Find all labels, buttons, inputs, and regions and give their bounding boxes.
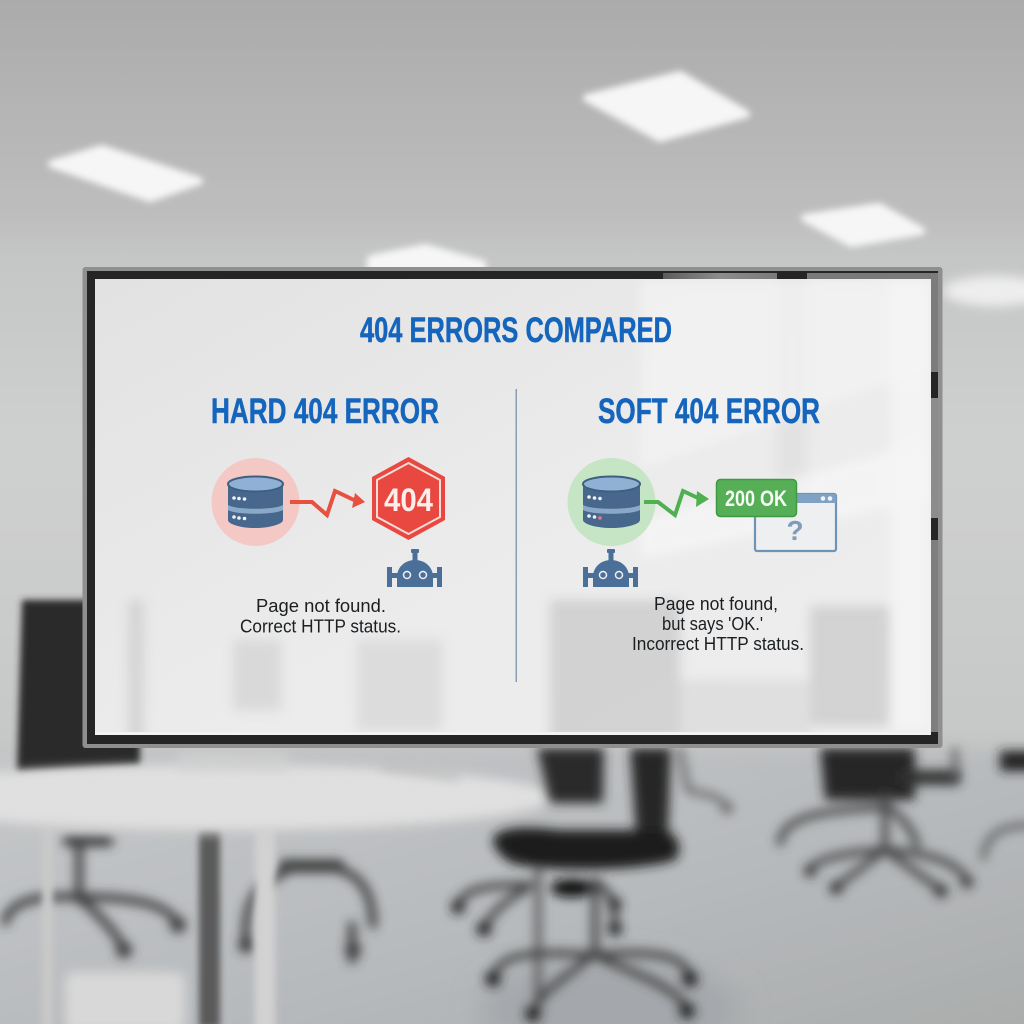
icon: 404 hexagon bbox=[372, 457, 445, 540]
title: 404 ERRORS COMPARED bbox=[360, 311, 672, 350]
divider bbox=[516, 389, 517, 682]
background chair base bbox=[680, 750, 730, 811]
heading: soft 404: SOFT 404 ERROR bbox=[598, 392, 820, 431]
ceiling lights bbox=[52, 75, 921, 285]
screen surface bbox=[95, 279, 931, 735]
icon: server in red circle bbox=[212, 458, 300, 546]
panel: soft 404 error bbox=[568, 392, 836, 654]
left stools and bases bbox=[5, 841, 373, 960]
icon: robot bbox=[583, 549, 638, 587]
icon: browser window with question mark: ? bbox=[786, 515, 804, 546]
items on table bbox=[178, 752, 460, 781]
screen reflections bbox=[95, 275, 931, 740]
centre office chair bbox=[451, 748, 698, 1022]
icon: browser window with question mark bbox=[755, 494, 836, 551]
icon: server in green circle bbox=[568, 458, 656, 546]
far right ceiling light bbox=[943, 276, 1024, 306]
text: hard 404 description bbox=[240, 595, 401, 636]
round table bbox=[0, 765, 552, 834]
icon: 404 hexagon: 404 bbox=[384, 482, 433, 518]
monitor outer frame bbox=[82, 267, 942, 748]
arrow: red jagged bbox=[290, 491, 365, 515]
arrow: green jagged bbox=[644, 491, 709, 515]
text: hard 404 description: Correct HTTP status. bbox=[240, 616, 401, 636]
pale box on floor bbox=[65, 972, 185, 1024]
right office chair bbox=[780, 748, 973, 898]
text: soft 404 description bbox=[632, 593, 804, 654]
left chair back bbox=[17, 600, 140, 772]
icon: robot bbox=[387, 549, 442, 587]
wall monitor bbox=[82, 267, 942, 748]
text: soft 404 description: Incorrect HTTP status. bbox=[632, 633, 804, 654]
text: hard 404 description: Page not found. bbox=[256, 595, 386, 616]
badge: 200 OK: 200 OK bbox=[725, 486, 787, 511]
far right chair bbox=[955, 748, 1024, 860]
heading: hard 404: HARD 404 ERROR bbox=[211, 392, 439, 431]
panel: hard 404 error bbox=[211, 392, 445, 636]
table leg bbox=[199, 828, 220, 1024]
text: soft 404 description: but says 'OK.' bbox=[662, 613, 763, 634]
monitor bezel bbox=[87, 271, 938, 744]
badge: 200 OK bbox=[716, 480, 796, 516]
text: soft 404 description: Page not found, bbox=[654, 593, 778, 614]
table column bbox=[255, 825, 275, 1024]
